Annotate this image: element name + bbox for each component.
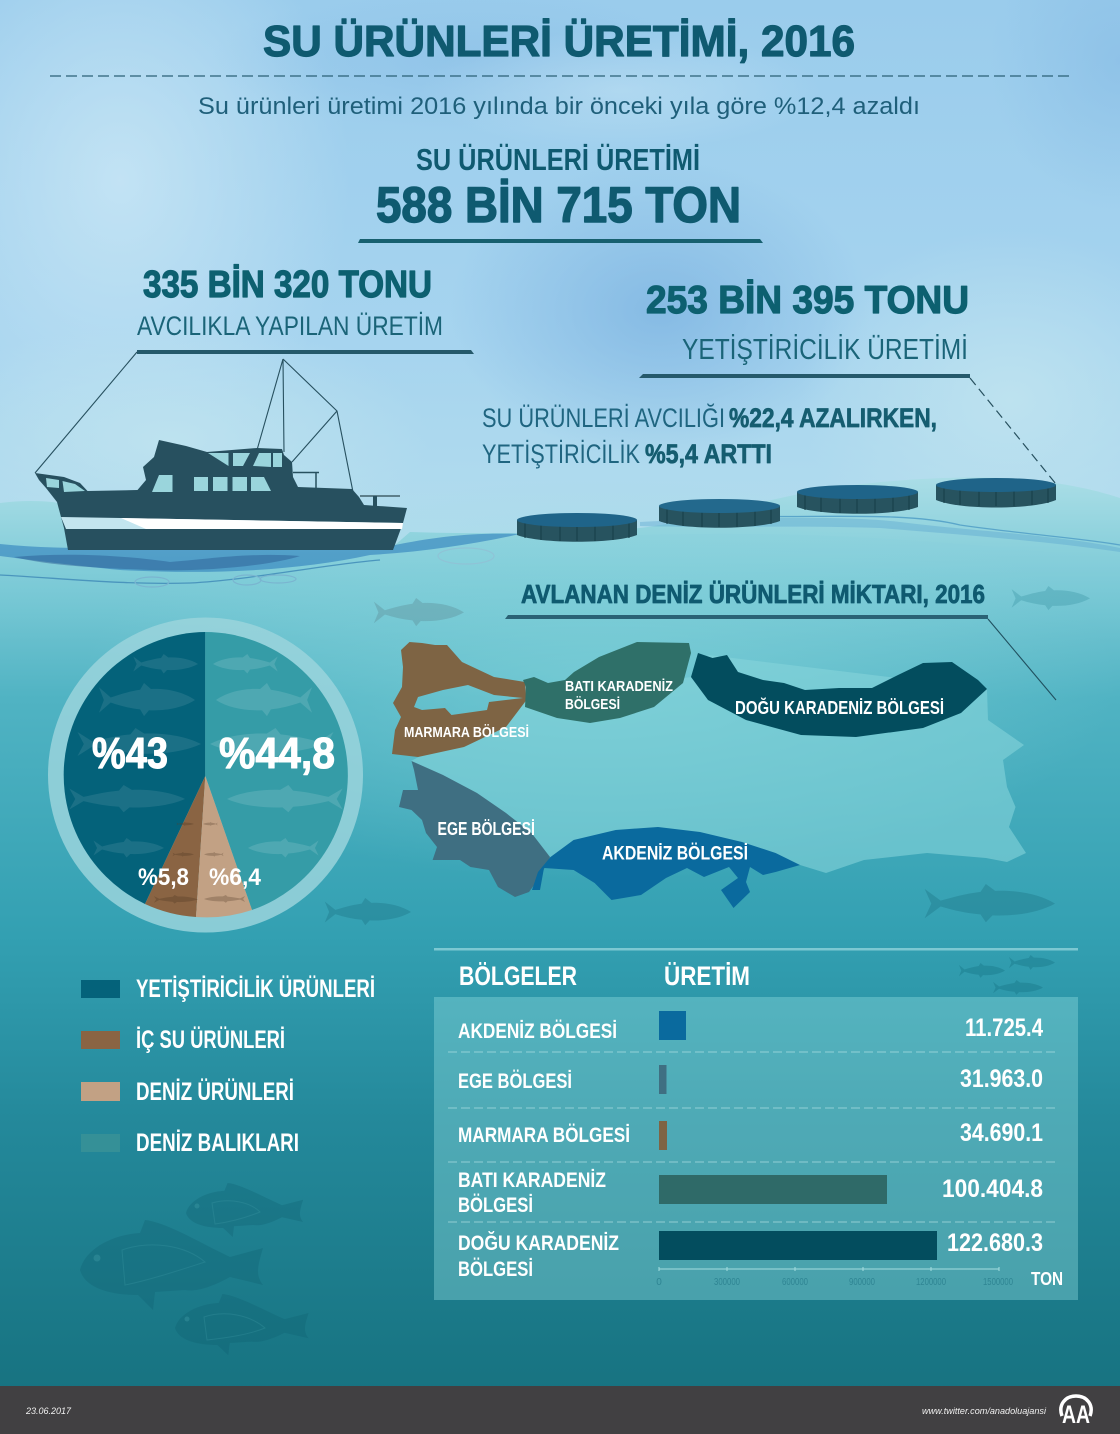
chart axis bbox=[656, 1267, 1063, 1289]
chart axis: 0 bbox=[656, 1277, 662, 1288]
pie value: 5.8: %5,8 bbox=[138, 864, 189, 891]
catch underline bbox=[137, 350, 474, 354]
table headers bbox=[459, 961, 750, 991]
region labels: BÖLGESİ bbox=[565, 696, 620, 713]
pie chart bbox=[48, 618, 363, 932]
change note: SU ÜRÜNLERİ AVCILIĞI bbox=[482, 402, 725, 433]
region labels: MARMARA BÖLGESİ bbox=[404, 724, 529, 741]
chart axis: TON bbox=[1031, 1269, 1063, 1289]
region labels: BATI KARADENİZ bbox=[565, 678, 673, 695]
table: regional production bbox=[434, 948, 1078, 1300]
row: Akdeniz: AKDENİZ BÖLGESİ bbox=[458, 1020, 617, 1043]
slice: aquaculture bbox=[64, 632, 205, 904]
cage 4 bbox=[936, 478, 1056, 508]
right block: aquaculture production bbox=[639, 279, 1056, 484]
chart axis: 1500000 bbox=[983, 1277, 1013, 1288]
table headers: ÜRETİM bbox=[664, 961, 750, 991]
legend: sea fish: DENİZ BALIKLARI bbox=[136, 1129, 299, 1157]
total value: 588 BİN 715 TON bbox=[376, 177, 741, 233]
row: Akdeniz bbox=[458, 1011, 1043, 1043]
aquaculture value: 253 BİN 395 TONU bbox=[646, 279, 969, 322]
change note: %5,4 ARTTI bbox=[645, 439, 772, 469]
background: sky bbox=[0, 0, 1120, 620]
pie value: 43: %43 bbox=[92, 729, 168, 778]
row: Doğu Karadeniz bbox=[458, 1229, 1043, 1281]
table panel bbox=[434, 997, 1078, 1300]
legend: inland bbox=[81, 1025, 285, 1054]
pie value: 44.8: %44,8 bbox=[219, 729, 335, 778]
total underline bbox=[358, 239, 763, 243]
row: Ege bbox=[458, 1065, 1043, 1094]
table headers: BÖLGELER bbox=[459, 961, 577, 991]
total label: SU ÜRÜNLERİ ÜRETİMİ bbox=[416, 142, 700, 177]
legend: aquaculture: YETİŞTİRİCİLİK ÜRÜNLERİ bbox=[136, 974, 375, 1003]
background: sea bbox=[0, 478, 1120, 1434]
row: Ege: 31.963.0 bbox=[960, 1065, 1043, 1093]
catch value: 335 BİN 320 TONU bbox=[143, 264, 432, 306]
slice: inland bbox=[145, 776, 205, 917]
chart axis: 300000 bbox=[714, 1277, 740, 1288]
region labels: EGE BÖLGESİ bbox=[438, 819, 535, 839]
change note: %22,4 AZALIRKEN, bbox=[729, 403, 937, 433]
aquaculture underline bbox=[639, 374, 970, 378]
cage 2 bbox=[659, 499, 780, 528]
footer link: www.twitter.com/anadoluajansi bbox=[922, 1406, 1047, 1417]
pie fish silhouettes bbox=[69, 654, 343, 904]
small fish above the table bbox=[959, 955, 1055, 995]
chart axis: 1200000 bbox=[916, 1277, 946, 1288]
heading: map section: AVLANAN DENİZ ÜRÜNLERİ MİKTARI, 2016 bbox=[521, 579, 985, 609]
row: Marmara bbox=[458, 1119, 1043, 1150]
title: SU ÜRÜNLERİ ÜRETİMİ, 2016 bbox=[263, 17, 855, 66]
row: Batı Karadeniz: BÖLGESİ bbox=[458, 1194, 533, 1217]
region: Aegean bbox=[399, 761, 550, 897]
footer date: 23.06.2017 bbox=[25, 1406, 72, 1417]
bream fish silhouettes bbox=[80, 1183, 309, 1355]
region labels: AKDENİZ BÖLGESİ bbox=[602, 844, 748, 864]
chart axis: 600000 bbox=[782, 1277, 808, 1288]
row: Doğu Karadeniz: 122.680.3 bbox=[947, 1229, 1043, 1257]
aquaculture label: YETİŞTİRİCİLİK ÜRETİMİ bbox=[682, 333, 968, 366]
pie ring bbox=[48, 618, 363, 932]
icon: agency logo: AA bbox=[1062, 1401, 1090, 1429]
change note bbox=[482, 402, 937, 469]
icon: fish farm cages bbox=[517, 478, 1056, 542]
legend: inland: İÇ SU ÜRÜNLERİ bbox=[136, 1025, 285, 1054]
background fish near surface bbox=[325, 586, 1090, 925]
region labels bbox=[404, 678, 944, 864]
land silhouette bbox=[411, 655, 1026, 873]
region: West Black Sea bbox=[523, 642, 691, 723]
legend bbox=[81, 974, 375, 1157]
subtitle: Su ürünleri üretimi 2016 yılında bir önceki yıla göre %12,4 azaldı bbox=[198, 93, 920, 120]
region: East Black Sea bbox=[691, 653, 987, 737]
row: Ege: EGE BÖLGESİ bbox=[458, 1070, 572, 1093]
pie value: 6.4: %6,4 bbox=[209, 864, 262, 891]
row: Doğu Karadeniz: BÖLGESİ bbox=[458, 1258, 533, 1281]
icon: agency logo bbox=[1061, 1396, 1091, 1429]
heading: map section bbox=[505, 579, 1056, 700]
row: Marmara: MARMARA BÖLGESİ bbox=[458, 1124, 630, 1147]
total production block bbox=[358, 142, 763, 243]
row: Batı Karadeniz: 100.404.8 bbox=[942, 1175, 1043, 1203]
slice: sea fish bbox=[205, 632, 348, 910]
row: Batı Karadeniz: BATI KARADENİZ bbox=[458, 1169, 606, 1192]
left block: catch production bbox=[137, 264, 474, 354]
row: Batı Karadeniz bbox=[458, 1169, 1043, 1217]
chart axis: 900000 bbox=[849, 1277, 875, 1288]
region labels: DOĞU KARADENİZ BÖLGESİ bbox=[735, 697, 944, 718]
row: Akdeniz: 11.725.4 bbox=[965, 1014, 1043, 1042]
water surface ripples bbox=[0, 515, 1120, 587]
change note: YETİŞTİRİCİLİK bbox=[482, 438, 640, 469]
dashed connector bbox=[970, 378, 1056, 484]
map of Turkey with regions bbox=[392, 642, 1026, 908]
region: Marmara bbox=[392, 642, 526, 757]
catch label: AVCILIKLA YAPILAN ÜRETİM bbox=[137, 310, 443, 341]
footer bar bbox=[0, 1386, 1120, 1434]
row: Doğu Karadeniz: DOĞU KARADENİZ bbox=[458, 1231, 619, 1255]
region: Mediterranean bbox=[532, 827, 800, 908]
legend: sea products bbox=[81, 1077, 294, 1106]
icon: fishing boat bbox=[35, 352, 407, 550]
legend: sea products: DENİZ ÜRÜNLERİ bbox=[136, 1077, 294, 1106]
legend: sea fish bbox=[81, 1129, 299, 1157]
cage 1 bbox=[517, 513, 637, 542]
legend: aquaculture bbox=[81, 974, 375, 1003]
row: Marmara: 34.690.1 bbox=[960, 1119, 1043, 1147]
cage 3 bbox=[797, 485, 918, 514]
slice: sea products bbox=[196, 776, 252, 917]
